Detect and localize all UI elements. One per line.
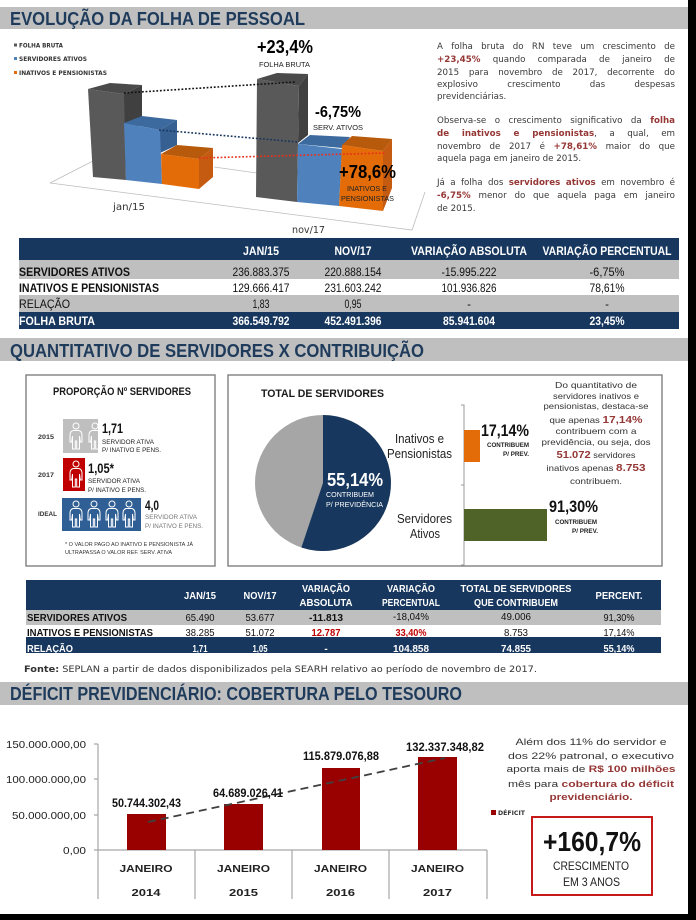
pie chart: 55,14% contribuem: P/ PREVIDÊNCIA: [326, 500, 383, 509]
table: evolução da folha: 220.888.154: [324, 267, 382, 279]
ratio row: 2015: 1,71: [102, 420, 123, 436]
table: evolução da folha: VARIAÇÃO PERCENTUAL: [542, 245, 672, 258]
table: evolução da folha: [19, 238, 679, 329]
pie chart: 55,14% contribuem: [255, 415, 391, 551]
text block: análise da folha: Já a folha dos servidores ativos em novembro é: [437, 178, 675, 188]
axes: [94, 744, 487, 899]
text block: cobertura do déficit: dos 22% patronal, o executivo: [508, 751, 674, 762]
bar chart: déficit: [6, 739, 487, 899]
value labels: 132.337.348,82: [406, 740, 484, 754]
pie chart: 55,14% contribuem: 55,14%: [327, 469, 383, 490]
table: evolução da folha: -15.995.222: [442, 267, 496, 279]
heading: evolução da folha de pessoal: EVOLUÇÃO DA FOLHA DE PESSOAL: [10, 8, 305, 29]
table: quantitativo de servidores: 1,71: [192, 644, 208, 655]
callout: servidores ativos -6,75%: -6,75%: [315, 104, 361, 121]
table: quantitativo de servidores: SERVIDORES ATIVOS: [27, 613, 127, 624]
table: quantitativo de servidores: 8.753: [504, 628, 528, 639]
table: evolução da folha: 23,45%: [590, 316, 624, 328]
ratio row: 2017: P/ INATIVO E PENS.: [88, 487, 146, 494]
source note: Fonte: SEPLAN a partir de dados disponibilizados pela SEARH relativo ao período de novembro de 2017.: [24, 665, 537, 675]
table: evolução da folha: FOLHA BRUTA: [19, 316, 95, 328]
table: quantitativo de servidores: -11.813: [309, 613, 343, 624]
callout: inativos +78,6%: INATIVOS E: [347, 184, 387, 193]
ratio row: ideal: IDEAL: [38, 511, 57, 518]
table: quantitativo de servidores: INATIVOS E PENSIONISTAS: [27, 628, 153, 639]
text block: destaque inativos: contribuem.: [570, 477, 622, 486]
y axis labels: [6, 739, 86, 857]
category labels: JANEIRO: [120, 863, 172, 875]
table: quantitativo de servidores: 104.858: [393, 644, 429, 655]
bar chart: contribuição por categoria: 91,30%: [549, 498, 598, 516]
table: evolução da folha: 0,95: [344, 299, 362, 311]
ratio row: 2015: P/ INATIVO E PENS.: [102, 447, 161, 454]
callout: folha bruta +23,4%: [257, 37, 313, 69]
text block: análise da folha: Observa-se o crescimento significativo da folha: [437, 116, 675, 126]
callout: crescimento +160,7%: EM 3 ANOS: [563, 875, 620, 889]
text block: análise da folha: aquela paga em janeiro de 2015.: [437, 154, 581, 164]
table: evolução da folha: NOV/17: [334, 246, 372, 258]
table: quantitativo de servidores: 51.072: [246, 628, 275, 639]
table: quantitativo de servidores: QUE CONTRIBUEM: [474, 598, 558, 609]
ratio row: 2017: 1,05*: [88, 460, 114, 476]
ratio row: 2015: 2015: [38, 434, 54, 441]
table: evolução da folha: -: [467, 299, 471, 311]
ratio row: ideal: [38, 497, 203, 531]
table: quantitativo de servidores: 74.855: [501, 644, 531, 655]
value labels: 50.744.302,43: [112, 796, 181, 810]
table: quantitativo de servidores: VARIAÇÃO: [387, 582, 435, 595]
text block: cobertura do déficit: aporta mais de R$ 100 milhões: [506, 764, 676, 775]
footnote: [65, 541, 193, 556]
ratio row: 2015: SERVIDOR ATIVA: [102, 439, 155, 446]
table: quantitativo de servidores: -: [324, 644, 328, 655]
table: evolução da folha: 236.883.375: [232, 267, 290, 279]
callout: crescimento +160,7%: CRESCIMENTO: [553, 859, 629, 873]
category labels: nov/17: [292, 225, 325, 236]
table: evolução da folha: RELAÇÃO: [19, 298, 70, 311]
table: quantitativo de servidores: [26, 580, 661, 655]
table: quantitativo de servidores: 53.677: [246, 613, 275, 624]
ratio row: ideal: SERVIDOR ATIVA: [145, 514, 198, 521]
table: quantitativo de servidores: -18,04%: [393, 612, 429, 623]
table: evolução da folha: VARIAÇÃO ABSOLUTA: [411, 245, 527, 258]
callout: inativos +78,6%: +78,6%: [339, 162, 396, 182]
footnote: ULTRAPASSA O VALOR REF. SERV. ATIVA: [65, 550, 172, 556]
category labels: [112, 202, 325, 236]
bar chart: contribuição por categoria: Pensionistas: [387, 446, 452, 461]
bar chart: contribuição por categoria: CONTRIBUEM: [555, 519, 597, 526]
table: quantitativo de servidores: 65.490: [186, 613, 215, 624]
chart legend: SERVIDORES ATIVOS: [19, 56, 87, 63]
trend line: [148, 758, 445, 822]
text block: análise da folha: novembro de 2017 é +78,61% maior do que: [437, 142, 675, 152]
table: quantitativo de servidores: ABSOLUTA: [300, 598, 352, 609]
table: quantitativo de servidores: PERCENT.: [596, 591, 643, 602]
category labels: [120, 863, 464, 899]
3D bar chart: folha de pessoal: [50, 37, 425, 236]
bars: novembro 2017: [256, 73, 392, 211]
text block: cobertura do déficit: previdenciário.: [550, 792, 632, 803]
heading: déficit previdenciário: [0, 682, 688, 705]
table: quantitativo de servidores: 1,05: [252, 644, 268, 655]
table: quantitativo de servidores: TOTAL DE SERVIDORES: [460, 584, 572, 595]
table: quantitativo de servidores: 17,14%: [604, 628, 635, 639]
callout: servidores ativos -6,75%: SERV. ATIVOS: [313, 123, 363, 132]
text block: análise da folha: +23,45% quando comparada de janeiro de: [437, 55, 675, 65]
text block: destaque inativos: Do quantitativo de: [555, 381, 638, 390]
value labels: 115.879.076,88: [303, 749, 379, 763]
callout: folha bruta +23,4%: FOLHA BRUTA: [259, 60, 310, 69]
text block: análise da folha: de 2015.: [437, 204, 476, 214]
table: quantitativo de servidores: 55,14%: [604, 644, 635, 655]
table: evolução da folha: 231.603.242: [324, 283, 382, 295]
panel: proporção nº servidores: [26, 375, 215, 566]
text block: destaque inativos: previdência, ou seja, dos: [542, 438, 650, 447]
text block: análise da folha: 2015 para novembro de 2017, decorrente do: [437, 68, 675, 78]
table: quantitativo de servidores: 49.006: [501, 612, 531, 623]
text block: análise da folha: A folha bruta do RN teve um crescimento de: [437, 42, 675, 52]
chart legend: FOLHA BRUTA: [19, 42, 63, 50]
callout: inativos +78,6%: [339, 162, 396, 203]
y axis labels: 150.000.000,00: [6, 739, 86, 751]
category labels: 2016: [326, 887, 355, 899]
bar chart: contribuição por categoria: Ativos: [410, 526, 440, 541]
bar chart: contribuição por categoria: 17,14%: [481, 422, 529, 440]
table: evolução da folha: 1,83: [252, 299, 270, 311]
ratio row: 2017: SERVIDOR ATIVA: [88, 478, 141, 485]
table: evolução da folha: 366.549.792: [232, 316, 290, 328]
panel: proporção nº servidores: PROPORÇÃO Nº SERVIDORES: [53, 385, 191, 398]
table: evolução da folha: 452.491.396: [324, 316, 382, 328]
table: quantitativo de servidores: PERCENTUAL: [382, 598, 440, 609]
legend: déficit: DÉFICIT: [498, 808, 526, 817]
panel: total de servidores: TOTAL DE SERVIDORES: [261, 388, 384, 400]
y axis labels: 100.000.000,00: [6, 774, 86, 786]
text block: cobertura do déficit: Além dos 11% do servidor e: [516, 737, 666, 748]
table: quantitativo de servidores: 33,40%: [396, 628, 427, 639]
text block: destaque inativos: inativos apenas 8.753: [546, 463, 646, 474]
heading: quantitativo de servidores: [0, 338, 688, 361]
chart legend: INATIVOS E PENSIONISTAS: [19, 70, 107, 77]
table: quantitativo de servidores: JAN/15: [184, 591, 216, 602]
text block: análise da folha: de inativos e pensionistas, a qual, em: [437, 129, 675, 139]
bar chart: contribuição por categoria: [387, 405, 598, 565]
category labels: 2017: [423, 887, 452, 899]
table: quantitativo de servidores: 12.787: [312, 628, 341, 639]
ratio row: 2017: [38, 458, 146, 494]
callout: crescimento +160,7%: +160,7%: [543, 826, 641, 857]
callout: inativos +78,6%: PENSIONISTAS: [341, 194, 394, 203]
table: evolução da folha: INATIVOS E PENSIONISTAS: [19, 283, 159, 295]
bars: [127, 757, 457, 850]
ratio row: ideal: P/ INATIVO E PENS.: [145, 523, 203, 530]
ratio row: 2015: [38, 419, 161, 454]
text block: destaque inativos: servidores inativos e: [553, 392, 640, 401]
panel: total de servidores: [228, 375, 662, 566]
bar chart: contribuição por categoria: CONTRIBUEM: [487, 442, 529, 449]
text block: cobertura do déficit: mês para cobertura do déficit: [508, 779, 675, 790]
table: evolução da folha: -6,75%: [590, 267, 624, 279]
callout: servidores ativos -6,75%: [313, 104, 363, 132]
category labels: 2014: [132, 887, 161, 899]
footnote: * O VALOR PAGO AO INATIVO E PENSIONISTA JÁ: [65, 541, 193, 548]
bar chart: contribuição por categoria: Inativos e: [395, 431, 444, 446]
ratio row: ideal: 4,0: [145, 497, 159, 513]
table: quantitativo de servidores: RELAÇÃO: [27, 642, 73, 655]
table: evolução da folha: 101.936.826: [442, 283, 496, 295]
text block: análise da folha: previdenciárias.: [437, 92, 506, 102]
category labels: JANEIRO: [411, 863, 464, 875]
text block: destaque inativos: [542, 381, 650, 486]
callout: crescimento +160,7%: [532, 817, 652, 895]
table: evolução da folha: JAN/15: [243, 246, 280, 258]
callout: folha bruta +23,4%: +23,4%: [257, 37, 313, 57]
ratio row: 2017: 2017: [38, 472, 54, 479]
category labels: 2015: [229, 887, 258, 899]
text block: destaque inativos: 51.072 servidores: [556, 450, 636, 461]
y axis labels: 50.000.000,00: [12, 810, 86, 822]
table: evolução da folha: SERVIDORES ATIVOS: [19, 267, 130, 279]
dotted trend lines: [124, 82, 385, 158]
value labels: 64.689.026,41: [213, 786, 283, 800]
text block: destaque inativos: que apenas 17,14%: [550, 415, 643, 426]
text block: cobertura do déficit: [506, 737, 676, 803]
chart legend: [14, 42, 107, 77]
text block: análise da folha: explosivo crescimento das despesas: [437, 80, 675, 90]
table: quantitativo de servidores: VARIAÇÃO: [302, 582, 350, 595]
heading: déficit previdenciário: DÉFICIT PREVIDENCIÁRIO: COBERTURA PELO TESOURO: [10, 683, 462, 704]
table: quantitativo de servidores: 38.285: [186, 628, 215, 639]
table: evolução da folha: 85.941.604: [443, 316, 496, 328]
table: evolução da folha: 78,61%: [590, 283, 624, 295]
table: evolução da folha: -: [605, 299, 609, 311]
bar chart: contribuição por categoria: P/ PREV.: [572, 528, 598, 535]
legend: déficit: [491, 808, 526, 817]
heading: evolução da folha de pessoal: [0, 7, 688, 29]
category labels: JANEIRO: [217, 863, 270, 875]
pie chart: 55,14% contribuem: CONTRIBUEM: [326, 490, 374, 499]
heading: quantitativo de servidores: QUANTITATIVO DE SERVIDORES X CONTRIBUIÇÃO: [10, 340, 424, 361]
y axis labels: 0,00: [63, 845, 86, 857]
table: evolução da folha: 129.666.417: [232, 283, 290, 295]
text block: análise da folha: [436, 42, 675, 214]
bar chart: contribuição por categoria: Servidores: [397, 511, 452, 526]
text block: análise da folha: -6,75% menor do que aquela paga em janeiro: [437, 191, 675, 201]
table: quantitativo de servidores: 91,30%: [604, 613, 635, 624]
category labels: JANEIRO: [314, 863, 367, 875]
text block: destaque inativos: contribuem com a: [556, 427, 637, 436]
bar chart: contribuição por categoria: P/ PREV.: [503, 451, 529, 458]
table: quantitativo de servidores: NOV/17: [244, 591, 277, 602]
category labels: jan/15: [112, 202, 145, 213]
value labels: [112, 740, 484, 810]
text block: destaque inativos: pensionistas, destaca-se: [544, 402, 649, 411]
bars: janeiro 2015: [88, 83, 213, 189]
